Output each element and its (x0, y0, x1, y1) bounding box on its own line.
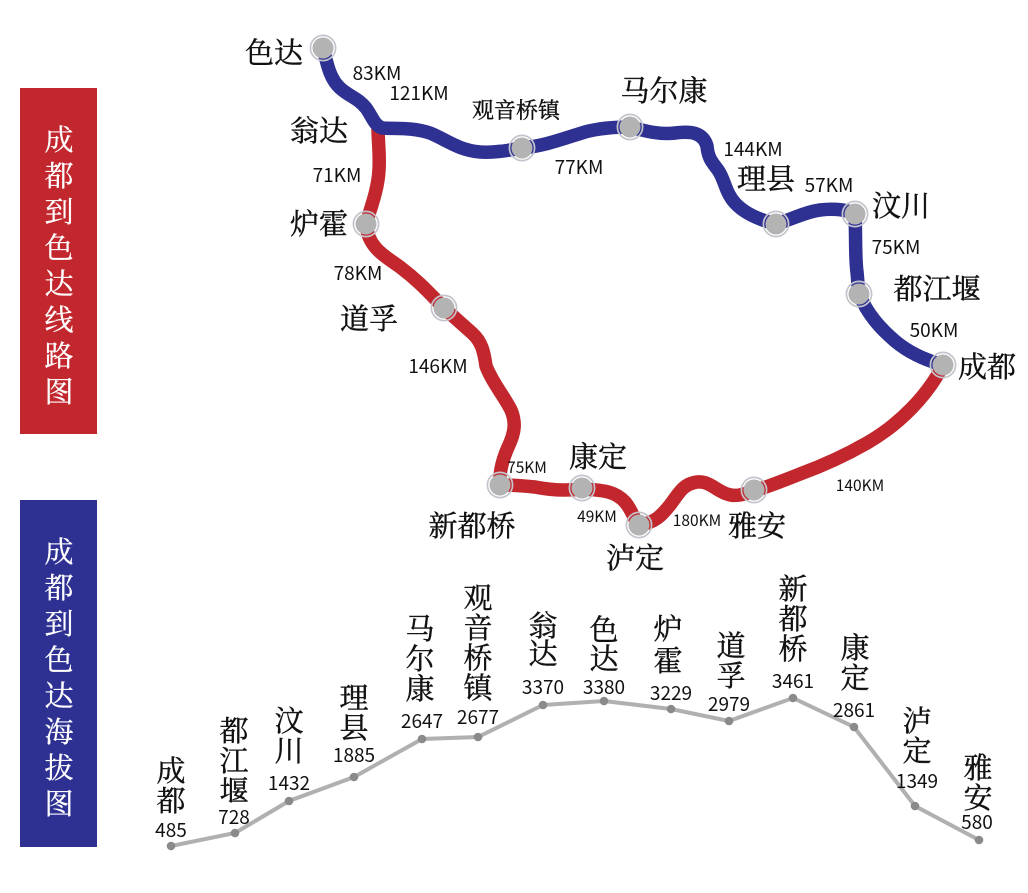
vertical station names: 达 (528, 638, 558, 671)
vertical station names: 尔 (405, 643, 435, 676)
distance labels: 75KM (507, 456, 547, 478)
panel: route title: 都 (44, 160, 74, 193)
panel: route title: 成 (44, 124, 74, 157)
elevation values: 3229 (650, 679, 692, 706)
vertical station names: 新 (778, 573, 808, 606)
vertical station names: 达 (589, 643, 619, 676)
vertical station names: 理 (339, 683, 369, 715)
elevation values: 2979 (708, 690, 750, 717)
vertical station names: 康 (840, 632, 870, 665)
station names: 理县 (737, 164, 795, 196)
distance labels: 50KM (910, 316, 958, 343)
vertical station names: 安 (963, 782, 993, 815)
panel: route title: 到 (44, 196, 74, 229)
vertical station names (156, 573, 993, 818)
distance labels: 75KM (872, 233, 920, 260)
vertical station names: 音 (463, 612, 493, 645)
vertical station names: 道 (716, 630, 746, 663)
vertical station names: 成 (156, 755, 186, 788)
vertical station names: 炉 (653, 613, 683, 646)
vertical station names: 霍 (653, 645, 683, 678)
station names: 汶川 (872, 190, 930, 223)
elevation values: 485 (155, 816, 187, 843)
station names: 新都桥 (428, 510, 516, 543)
vertical station names: 康 (405, 673, 435, 706)
distance labels: 146KM (408, 352, 468, 379)
elevation values: 580 (961, 808, 993, 835)
vertical station names: 马 (405, 614, 435, 646)
vertical station names: 定 (840, 662, 870, 695)
red route line (366, 128, 943, 525)
station names: 都江堰 (893, 273, 981, 306)
distance labels (313, 59, 958, 531)
station names: 翁达 (290, 115, 348, 148)
vertical station names: 翁 (528, 610, 558, 643)
panel: route title: 图 (44, 377, 74, 409)
elevation line (171, 698, 979, 846)
elevation values: 1432 (268, 769, 310, 796)
station names: 色达 (245, 37, 303, 70)
panel: route title: 路 (44, 340, 74, 373)
panel: elevation title: 都 (44, 572, 74, 605)
vertical station names: 雅 (963, 752, 993, 785)
panel: route title: 线 (44, 304, 74, 337)
panel: route title: 达 (44, 268, 74, 301)
vertical station names: 桥 (778, 633, 808, 666)
panel: route title: 色 (44, 232, 74, 265)
panel: elevation title: 海 (44, 716, 74, 749)
station names (245, 37, 1016, 575)
vertical station names: 泸 (902, 705, 932, 738)
elevation values: 3461 (772, 667, 814, 694)
vertical station names: 色 (589, 614, 619, 647)
station names: 道孚 (340, 303, 398, 336)
vertical station names: 桥 (463, 642, 493, 675)
station names: 雅安 (728, 510, 786, 543)
vertical station names: 都 (156, 785, 186, 818)
vertical station names: 镇 (463, 672, 494, 705)
distance labels: 121KM (389, 79, 449, 106)
elevation values: 2677 (457, 703, 499, 730)
marker rings (310, 35, 956, 538)
route map (245, 35, 1016, 575)
elevation line chart (155, 573, 993, 850)
elevation values: 3380 (583, 673, 625, 700)
elevation values: 3370 (522, 673, 564, 700)
elevation values: 1349 (896, 767, 938, 794)
panel: elevation title: 到 (44, 608, 74, 641)
distance labels: 77KM (555, 153, 603, 180)
blue route line (323, 48, 943, 365)
vertical station names: 都 (778, 603, 808, 636)
station markers (312, 38, 954, 536)
distance labels: 144KM (723, 135, 783, 162)
elevation values: 2861 (833, 696, 875, 723)
vertical station names: 定 (902, 735, 932, 768)
panel: elevation title (20, 500, 97, 847)
elevation values: 728 (218, 803, 250, 830)
panel: elevation title: 色 (44, 644, 74, 677)
elevation values (155, 667, 993, 843)
panel: elevation title: 成 (44, 536, 74, 569)
elevation values: 2647 (401, 707, 443, 734)
vertical station names: 观 (463, 583, 493, 615)
vertical station names: 江 (219, 746, 249, 778)
elevation values: 1885 (333, 741, 375, 768)
vertical station names: 汶 (274, 705, 304, 738)
vertical station names: 川 (274, 736, 304, 768)
distance labels: 140KM (836, 474, 884, 496)
vertical station names: 堰 (219, 776, 249, 808)
vertical station names: 都 (219, 715, 249, 748)
station names: 康定 (569, 441, 627, 474)
vertical station names: 县 (339, 713, 369, 745)
vertical station names: 孚 (716, 660, 746, 693)
station names: 马尔康 (620, 75, 708, 108)
station names: 泸定 (606, 542, 664, 575)
distance labels: 180KM (673, 509, 721, 531)
distance labels: 49KM (577, 505, 617, 527)
elevation points (167, 694, 983, 850)
distance labels: 71KM (313, 161, 361, 188)
panel: elevation title: 达 (44, 680, 74, 713)
station names: 炉霍 (290, 208, 348, 241)
panel: route title (20, 88, 97, 434)
panel: elevation title: 拔 (44, 752, 74, 785)
station names: 成都 (958, 351, 1016, 384)
station names: 观音桥镇 (472, 98, 562, 123)
distance labels: 78KM (334, 259, 382, 286)
distance labels: 57KM (805, 171, 853, 198)
panel: elevation title: 图 (44, 789, 74, 821)
distance labels: 83KM (353, 59, 401, 86)
